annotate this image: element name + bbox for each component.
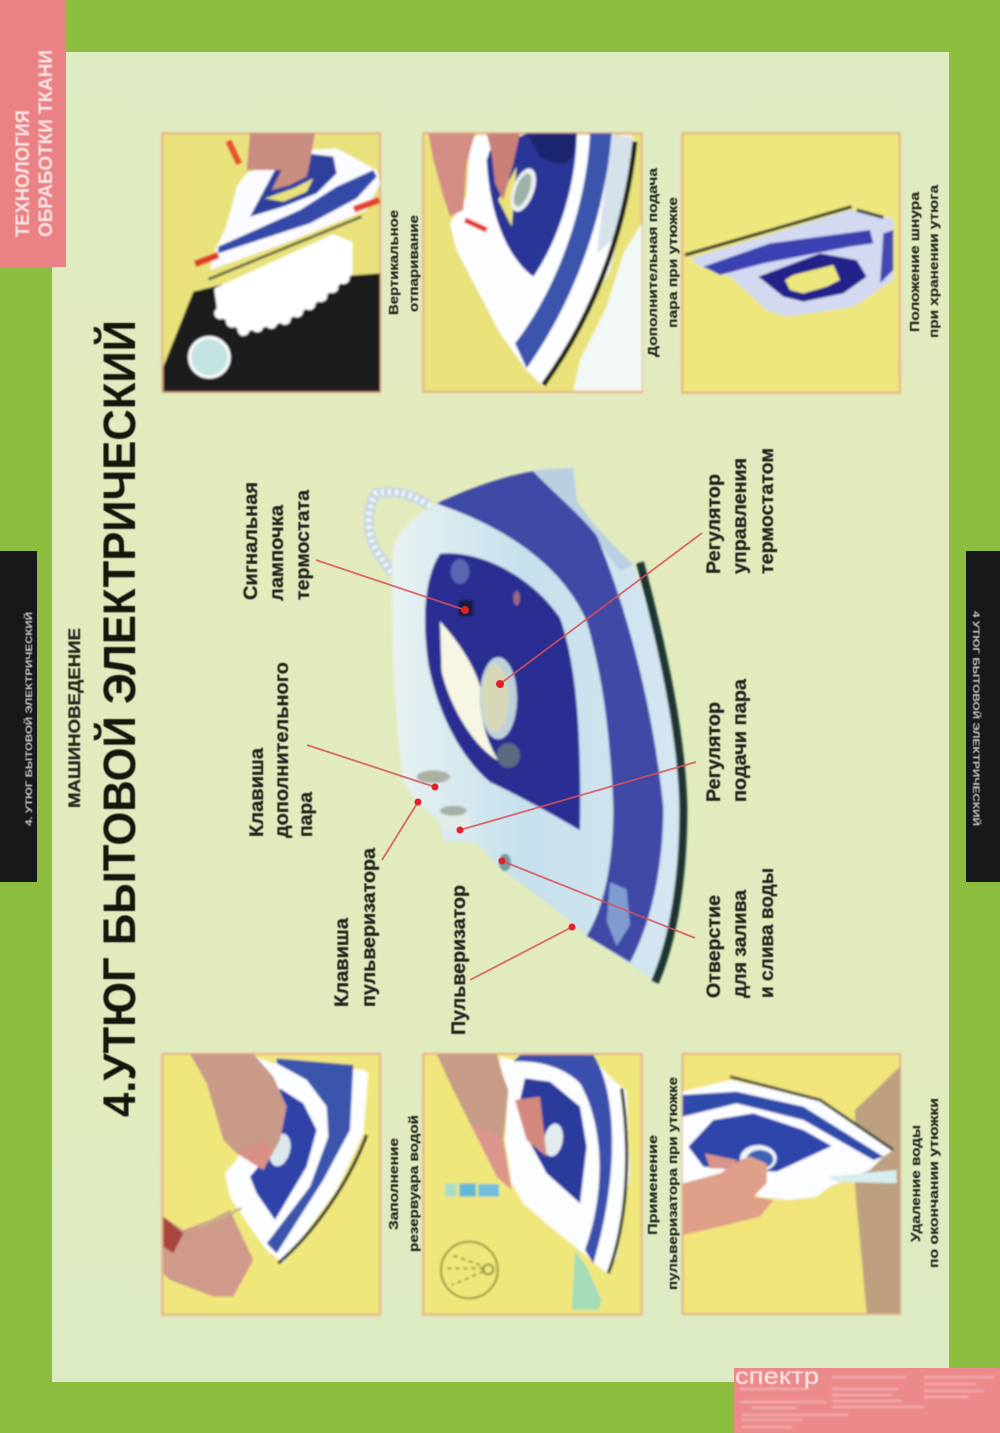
caption: cord storage: при хранении утюга <box>926 184 941 338</box>
photo: removing water <box>683 1054 900 1314</box>
left black strip <box>0 551 37 882</box>
label: signal lamp: лампочка <box>267 505 288 601</box>
photo: filling the tank <box>162 1054 380 1315</box>
subject heading: МАШИНОВЕДЕНИЕ <box>65 628 84 808</box>
label: water opening: Отверстие <box>704 895 725 998</box>
right black strip <box>966 551 1000 882</box>
label: signal lamp <box>241 482 314 601</box>
label: thermostat regulator <box>704 448 778 574</box>
label: steam regulator <box>704 679 751 802</box>
photo: vertical steaming <box>162 133 380 392</box>
label: water opening: для залива <box>730 890 751 998</box>
label: extra steam key: пара <box>296 792 317 837</box>
caption: extra steam <box>645 167 680 357</box>
photo: cord storage <box>682 133 900 393</box>
caption: extra steam: Дополнительная подача <box>645 167 660 357</box>
title: 4.УТЮГ БЫТОВОЙ ЭЛЕКТРИЧЕСКИЙ <box>94 320 145 1117</box>
caption: using the sprayer: пульверизатора при утюжке <box>665 1077 680 1290</box>
right black strip: 4 УТЮГ БЫТОВОЙ ЭЛЕКТРИЧЕСКИЙ <box>971 611 982 826</box>
publisher footer <box>734 1363 1000 1433</box>
label: extra steam key: Клавиша <box>247 748 268 837</box>
caption: extra steam: пара при утюжке <box>665 197 680 328</box>
section tab: ТЕХНОЛОГИЯ <box>13 110 34 237</box>
caption: vertical steaming <box>386 210 421 315</box>
caption: filling the tank <box>386 1115 421 1252</box>
caption: using the sprayer <box>645 1077 680 1290</box>
label: thermostat regulator: Регулятор <box>704 474 725 574</box>
caption: removing water: Удаление воды <box>908 1125 923 1242</box>
caption: vertical steaming: отпаривание <box>406 215 421 312</box>
photo: extra steam <box>423 133 642 392</box>
caption: filling the tank: резервуара водой <box>406 1115 421 1252</box>
label: extra steam key <box>247 662 317 838</box>
section tab: ОБРАБОТКИ ТКАНИ <box>36 50 57 237</box>
icon: power cord <box>369 492 430 574</box>
label: signal lamp: термостата <box>293 490 314 600</box>
label: thermostat regulator: управления <box>730 458 751 574</box>
caption: cord storage: Положение шнура <box>907 191 922 332</box>
label: sprayer: Пульверизатор <box>449 885 470 1035</box>
caption: removing water <box>908 1098 941 1268</box>
label: steam regulator: подачи пара <box>730 679 751 802</box>
main iron illustration <box>369 468 683 982</box>
label: water opening: и слива воды <box>757 868 778 998</box>
iron body <box>392 468 683 982</box>
label: thermostat regulator: термостатом <box>757 448 778 574</box>
label: water opening <box>704 868 778 998</box>
label: extra steam key: дополнительного <box>272 662 293 838</box>
label: sprayer key: пульверизатора <box>359 848 380 1007</box>
caption: cord storage <box>907 184 941 338</box>
caption: removing water: по окончании утюжки <box>926 1098 941 1268</box>
left black strip: 4. УТЮГ БЫТОВОЙ ЭЛЕКТРИЧЕСКИЙ <box>23 612 34 826</box>
photo: using the sprayer <box>423 1054 642 1315</box>
caption: using the sprayer: Применение <box>645 1135 660 1235</box>
publisher footer: спектр <box>735 1363 819 1389</box>
label: steam regulator: Регулятор <box>704 702 725 802</box>
caption: filling the tank: Заполнение <box>386 1138 401 1230</box>
label: sprayer key <box>332 848 380 1007</box>
label: signal lamp: Сигнальная <box>241 482 262 600</box>
label: sprayer key: Клавиша <box>332 918 353 1007</box>
callout lines and markers <box>307 533 702 980</box>
caption: vertical steaming: Вертикальное <box>386 210 401 315</box>
section tab <box>0 0 66 267</box>
